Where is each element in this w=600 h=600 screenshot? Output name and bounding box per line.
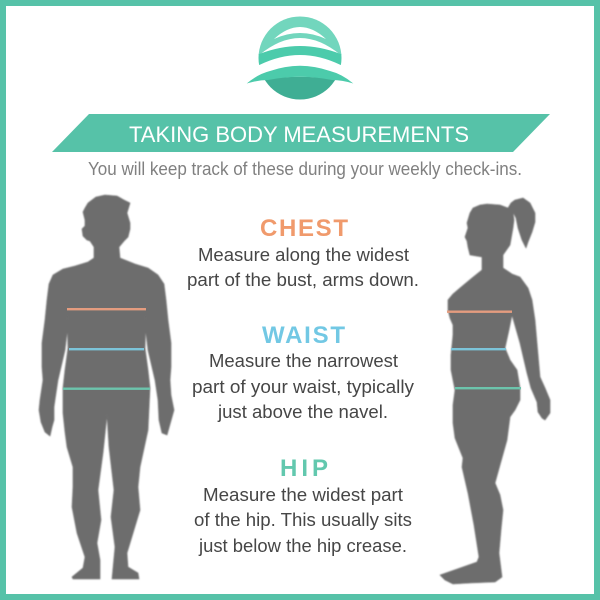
title banner: TAKING BODY MEASUREMENTS [129,122,469,147]
chest instructions: Measure along the widest [198,244,409,265]
male silhouette with measurement lines [39,195,174,579]
waist instructions: Measure the narrowest [209,350,398,371]
male waist line [69,348,144,350]
chest heading: CHEST [260,215,348,242]
chest section [187,215,419,290]
female waist line [451,348,506,350]
title banner [52,114,550,152]
male hip line [63,388,150,390]
waist instructions: just above the navel. [217,401,388,422]
hip heading: HIP [280,455,328,482]
waist heading: WAIST [262,322,345,349]
chest instructions: part of the bust, arms down. [187,269,419,290]
female chest line [447,310,512,313]
hip instructions: Measure the widest part [203,484,403,505]
hip instructions: just below the hip crease. [198,535,407,556]
female hip line [455,387,521,389]
waist section [192,322,415,422]
hip instructions: of the hip. This usually sits [194,509,412,530]
waist instructions: part of your waist, typically [192,376,415,397]
male chest line [67,308,146,310]
female silhouette with measurement lines [440,198,550,584]
hip section [194,455,412,556]
icon: logo [246,16,354,100]
subtitle: You will keep track of these during your weekly check-ins. [88,158,522,179]
